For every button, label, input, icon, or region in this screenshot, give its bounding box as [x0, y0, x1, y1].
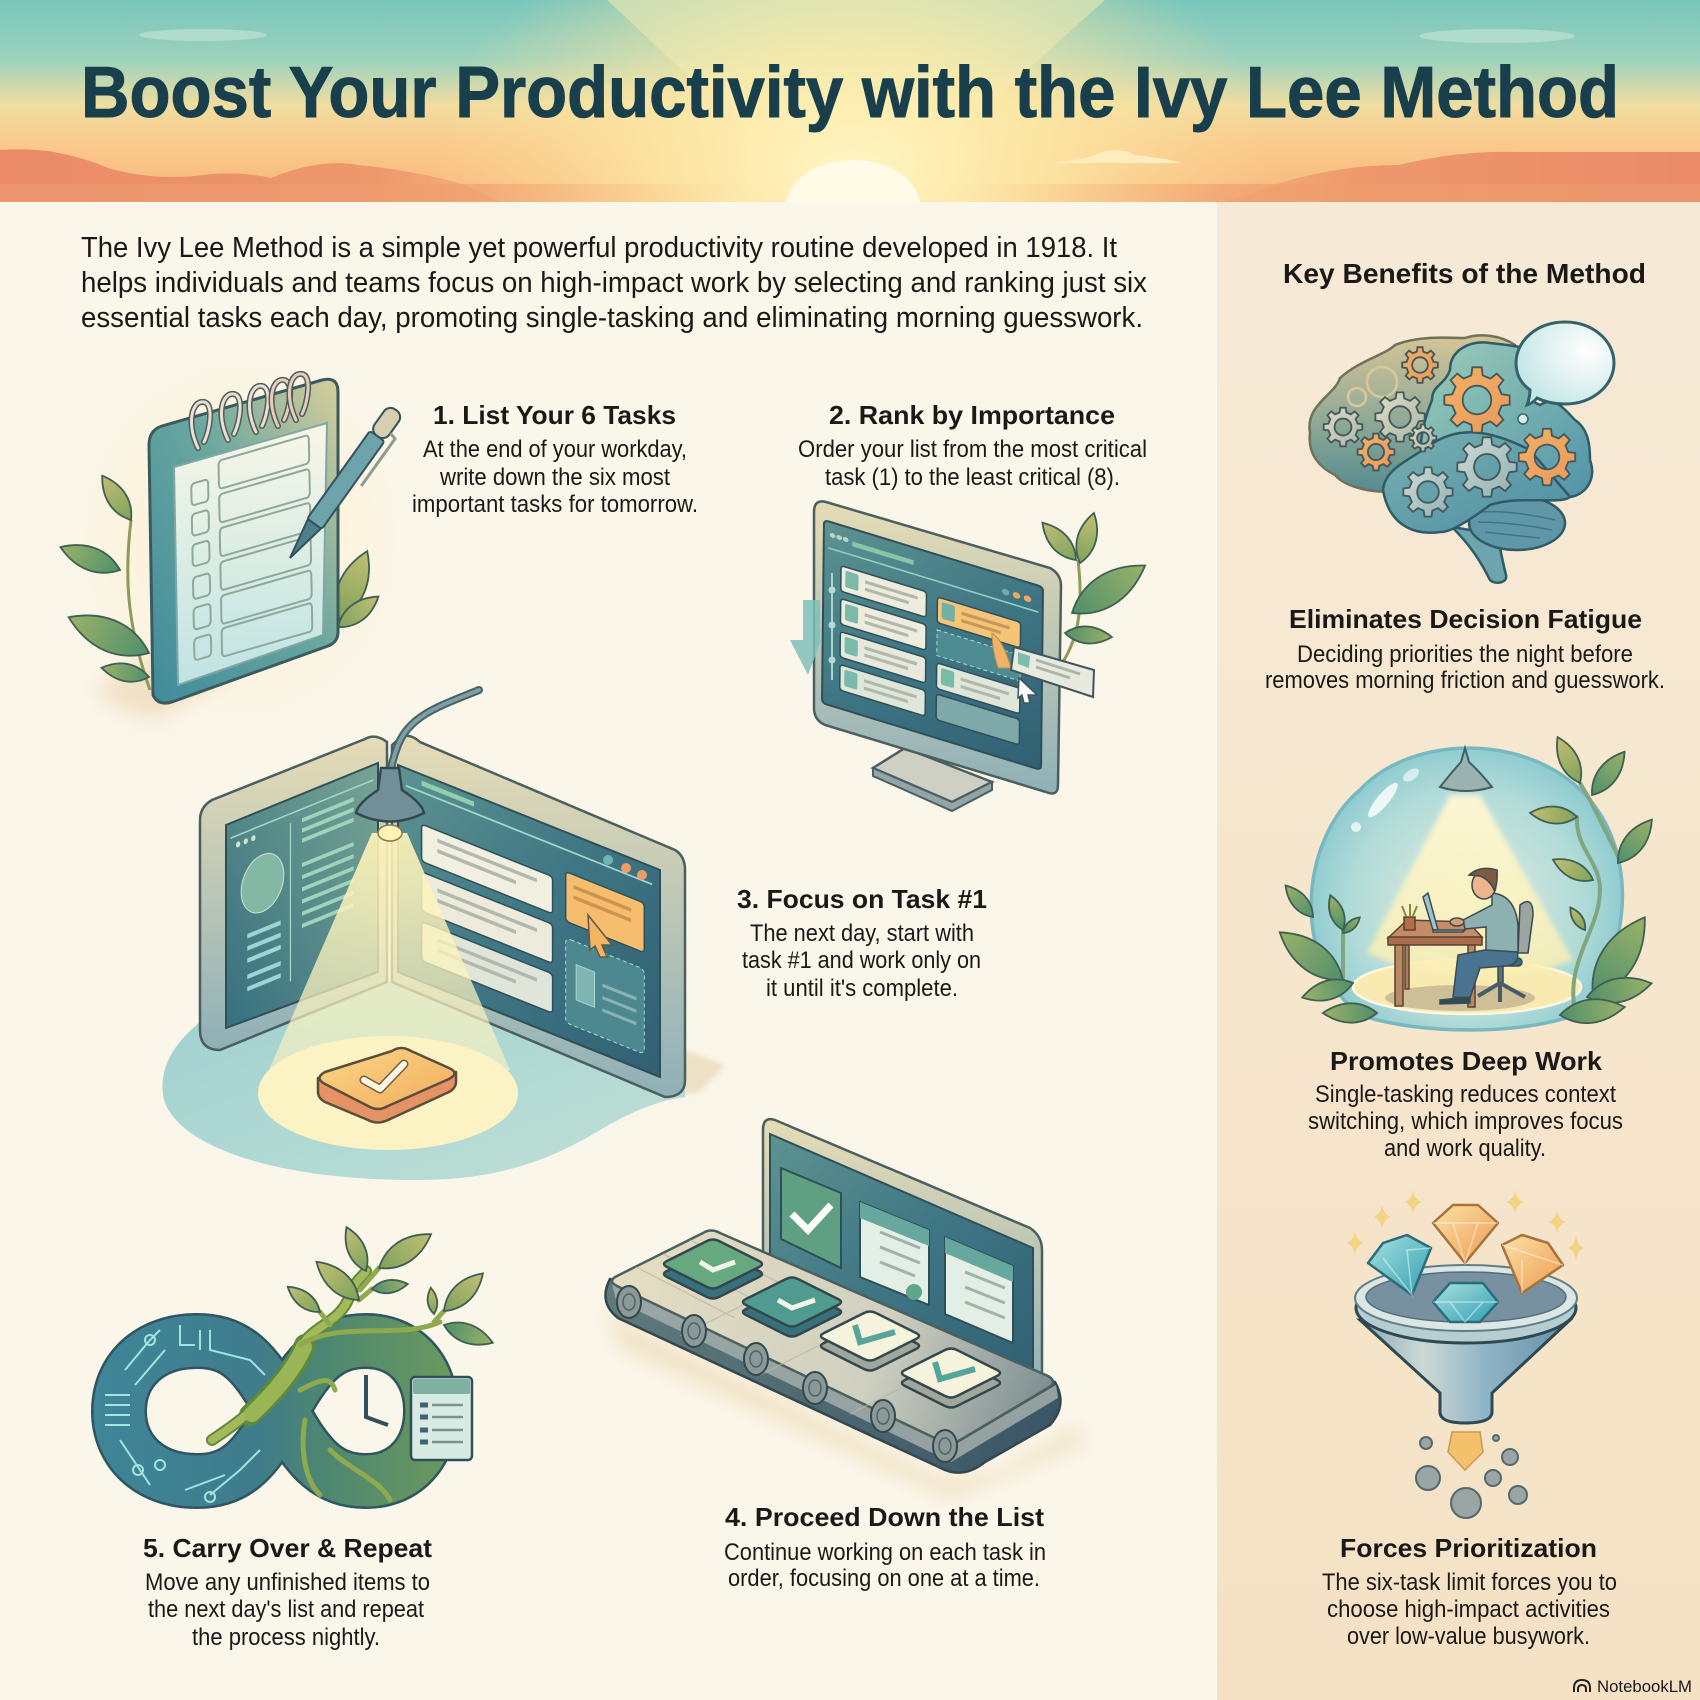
- step 4 text: 4. Proceed Down the List: [725, 1502, 1044, 1532]
- checklist card: [411, 1377, 472, 1460]
- benefit 1 text: Eliminates Decision Fatigue: [1289, 604, 1642, 634]
- benefit 1 text: [1265, 604, 1665, 694]
- step 5 text: 5. Carry Over & Repeat: [143, 1533, 432, 1563]
- cursor: [1018, 678, 1037, 703]
- step 5 text: [143, 1533, 432, 1651]
- spiral rings: [191, 374, 308, 448]
- gems: [1368, 1205, 1563, 1322]
- step 2 text: 2. Rank by Importance: [829, 400, 1115, 430]
- benefit 3 text: The six-task limit forces you to: [1322, 1569, 1617, 1596]
- icon: monitor with ranked cards: [790, 501, 1154, 811]
- speech bubble: [1516, 322, 1614, 405]
- intro paragraph: The Ivy Lee Method is a simple yet powerful productivity routine developed in 1918. It: [81, 232, 1117, 264]
- benefit 3 text: choose high-impact activities: [1327, 1596, 1610, 1623]
- step 3 text: 3. Focus on Task #1: [737, 884, 987, 914]
- step 3 text: [737, 884, 987, 1002]
- step 4 text: order, focusing on one at a time.: [728, 1565, 1040, 1592]
- dragged card: [992, 633, 1011, 668]
- step 1 text: [412, 400, 698, 518]
- step 5 text: Move any unfinished items to: [145, 1569, 430, 1596]
- chair: [1477, 902, 1533, 1002]
- icon: funnel with gems: [1346, 1190, 1585, 1518]
- icon: brain with gears: [1309, 322, 1614, 583]
- pen: [283, 405, 409, 567]
- NotebookLM badge: NotebookLM: [1597, 1677, 1692, 1696]
- icon: spotlight on task one: [162, 690, 725, 1180]
- funnel body: [1360, 1320, 1570, 1423]
- pebbles: [1416, 1435, 1527, 1518]
- person at laptop: [1423, 868, 1518, 1004]
- circuit traces: [105, 1325, 265, 1502]
- vine: [212, 1271, 366, 1440]
- step 3 text: The next day, start with: [750, 920, 974, 947]
- benefit 1 text: Deciding priorities the night before: [1297, 641, 1633, 668]
- step 2 text: Order your list from the most critical: [798, 436, 1147, 463]
- hanging lamp: [1440, 748, 1492, 791]
- intro paragraph: essential tasks each day, promoting single-tasking and eliminating morning guesswork.: [81, 302, 1143, 334]
- light cone: [269, 833, 510, 1095]
- plants around bubble: [1343, 783, 1620, 1012]
- step 3 text: it until it's complete.: [766, 975, 958, 1002]
- panel heading: key benefits: Key Benefits of the Method: [1283, 258, 1646, 289]
- step 4 text: Continue working on each task in: [724, 1539, 1046, 1566]
- icon: infinity loop with vine: [105, 1224, 496, 1502]
- header banner: [0, 0, 1700, 202]
- back monitor: [763, 1119, 1042, 1390]
- benefit 3 text: [1322, 1533, 1617, 1650]
- benefit 2 text: Single-tasking reduces context: [1315, 1081, 1616, 1108]
- benefit 3 text: Forces Prioritization: [1340, 1533, 1597, 1563]
- rollers: [617, 1286, 957, 1462]
- task cards on belt: [664, 1240, 1000, 1408]
- step 4 text: [724, 1502, 1046, 1592]
- step 1 text: important tasks for tomorrow.: [412, 491, 698, 518]
- step 2 text: task (1) to the least critical (8).: [825, 464, 1120, 491]
- benefit 2 text: [1308, 1046, 1623, 1162]
- step 3 text: task #1 and work only on: [742, 947, 981, 974]
- step 5 text: the next day's list and repeat: [148, 1596, 424, 1623]
- down arrow: [790, 600, 821, 675]
- belt side: [606, 1279, 1060, 1473]
- falling gem: [1448, 1432, 1483, 1470]
- benefit 3 text: over low-value busywork.: [1347, 1623, 1590, 1650]
- intro paragraph: helps individuals and teams focus on high-impact work by selecting and ranking just six: [81, 267, 1147, 299]
- benefit 1 text: removes morning friction and guesswork.: [1265, 667, 1665, 694]
- icon: deep work bubble: [1271, 733, 1660, 1030]
- check tile: [318, 1048, 456, 1122]
- back walls: [200, 737, 387, 1050]
- step 5 text: the process nightly.: [192, 1624, 380, 1651]
- lamp: [390, 690, 479, 775]
- intro paragraph: [81, 232, 1147, 334]
- step 1 text: write down the six most: [439, 464, 670, 491]
- desk: [1388, 917, 1482, 1007]
- step 1 text: At the end of your workday,: [423, 436, 687, 463]
- icon: notepad and pen: [56, 350, 410, 730]
- icon: conveyor belt of finished tasks: [605, 1119, 1085, 1500]
- benefit 2 text: switching, which improves focus: [1308, 1108, 1623, 1135]
- clock hands: [366, 1375, 388, 1425]
- benefit 2 text: Promotes Deep Work: [1330, 1046, 1603, 1076]
- benefit 2 text: and work quality.: [1384, 1135, 1546, 1162]
- step 2 text: [798, 400, 1147, 491]
- step 1 text: 1. List Your 6 Tasks: [433, 400, 676, 430]
- main title: Boost Your Productivity with the Ivy Lee Method: [81, 53, 1619, 133]
- panel: key benefits background: [1217, 202, 1700, 1700]
- sun: [786, 160, 920, 202]
